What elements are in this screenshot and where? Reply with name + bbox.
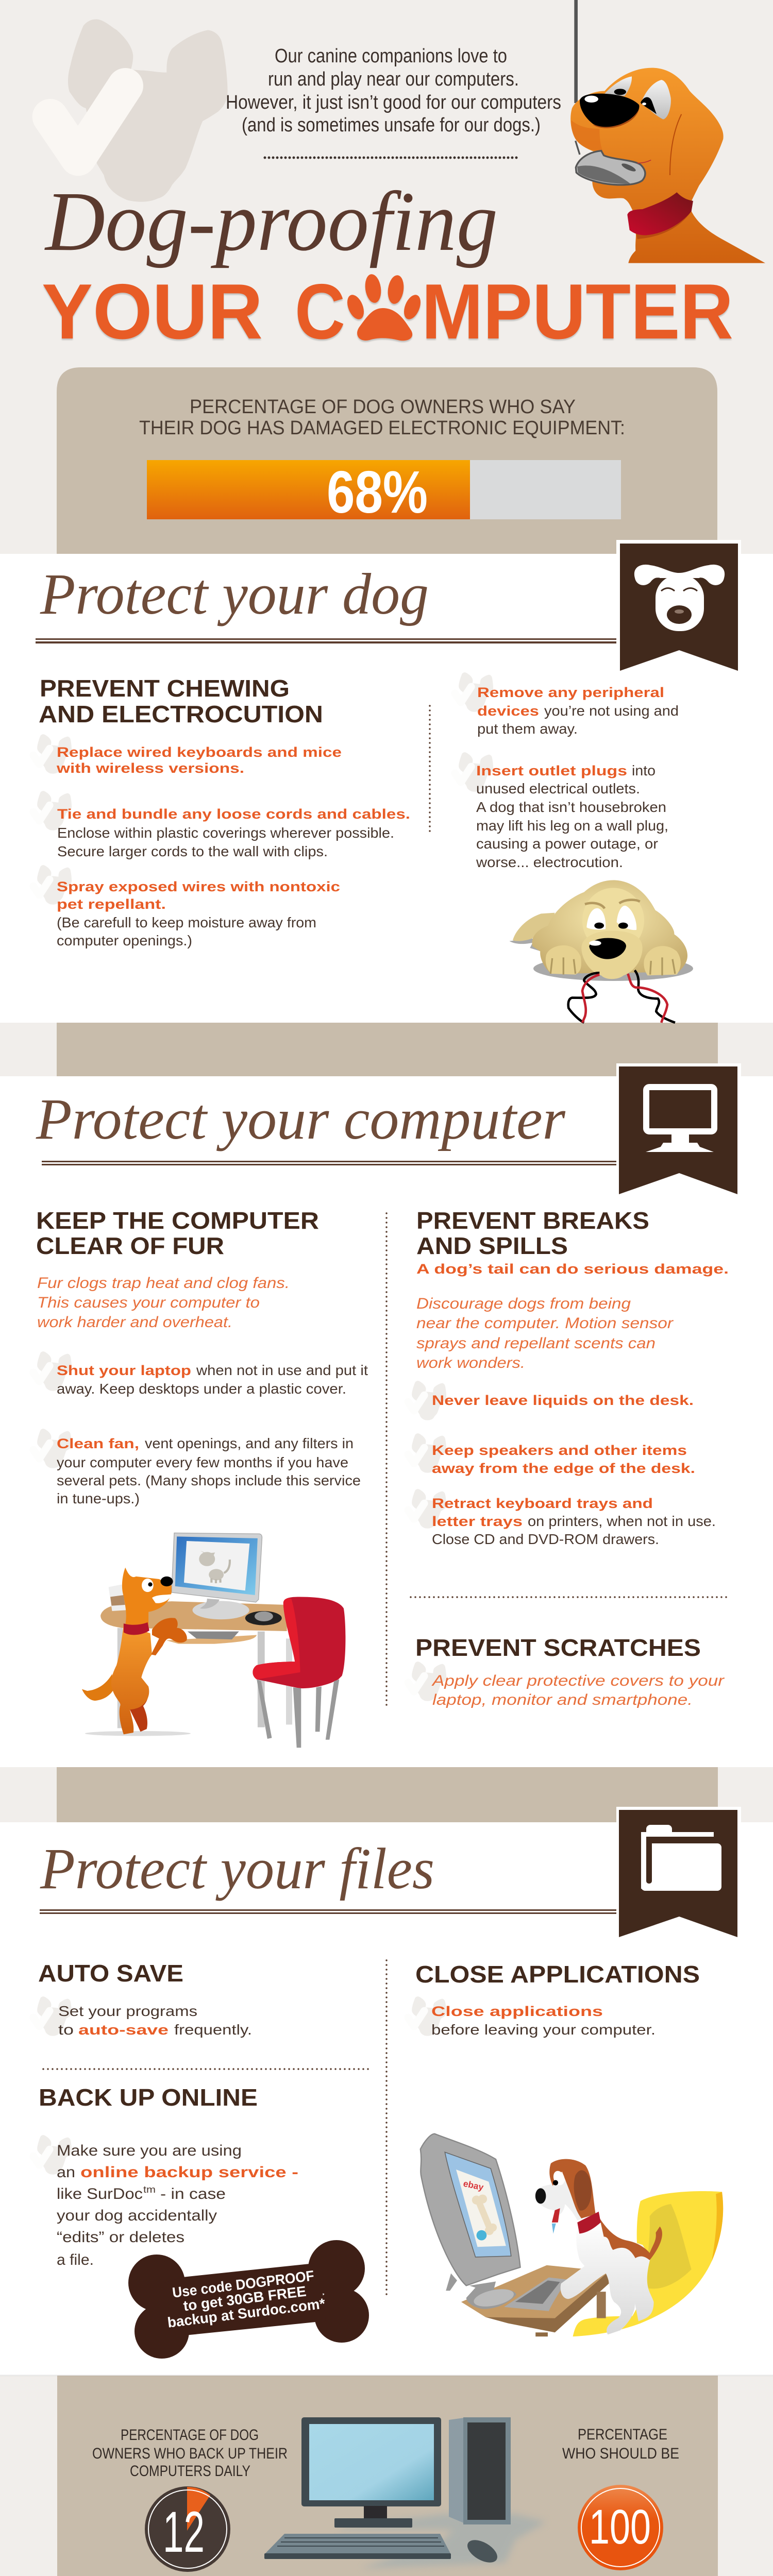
banner: folder icon (616, 1807, 741, 1942)
section: back up online: an (57, 2164, 75, 2181)
chart: 100 percent dial (578, 2485, 663, 2570)
callout: bone with coupon code: Use code DOGPROOF (172, 2267, 315, 2301)
panel: 68 percent statistic: PERCENTAGE OF DOG OWNERS WHO SAY (190, 396, 576, 418)
heading: prevent chewing: PREVENT CHEWING (40, 675, 290, 702)
tip: retract keyboard trays (408, 1489, 716, 1547)
text: fur clogs: This causes your computer to (37, 1294, 260, 1311)
tip: prevent scratches: PREVENT SCRATCHES (415, 1634, 701, 1661)
tip: prevent scratches: laptop, monitor and smartphone. (432, 1691, 693, 1708)
section: back up online: “edits” or deletes (57, 2229, 184, 2246)
panel: 68 percent statistic: THEIR DOG HAS DAMAGED ELECTRONIC EQUIPMENT: (139, 417, 625, 439)
intro text: However, it just isn’t good for our computers (226, 92, 561, 113)
intro text (226, 45, 561, 136)
tip: remove peripherals: you’re not using and (544, 703, 679, 719)
text: discourage dogs (416, 1295, 674, 1371)
tip: repellant (33, 865, 340, 948)
heading: Protect your computer: Protect your computer (36, 1087, 566, 1151)
banner: dog icon (616, 540, 741, 676)
heading: prevent chewing (39, 675, 323, 727)
callout: bone with coupon code: to get 30GB FREE (182, 2283, 307, 2314)
heading: prevent breaks and spills: A dog’s tail can do serious damage. (416, 1261, 729, 1277)
text: fur clogs: work harder and overheat. (37, 1314, 232, 1331)
tip: prevent scratches: Apply clear protective covers to your (431, 1672, 725, 1689)
tip: wireless keyboards: Replace wired keyboards and mice (57, 744, 342, 760)
tip: prevent scratches (408, 1634, 725, 1708)
title: YOUR COMPUTER with paw: MPUTER (422, 268, 733, 355)
tip: retract keyboard trays: letter trays (432, 1514, 523, 1529)
section: auto save: Set your programs (58, 2003, 197, 2019)
tip: bundle cords: Enclose within plastic coverings wherever possible. (57, 825, 394, 841)
heading: prevent breaks and spills (416, 1207, 729, 1277)
tip: keep speakers away (408, 1433, 695, 1476)
section: auto save: auto-save (78, 2022, 169, 2038)
illustration: tan puppy chewing wires (509, 880, 693, 1023)
tip: bundle cords: Tie and bundle any loose cords and cables. (57, 806, 410, 822)
intro text: run and play near our computers. (268, 69, 519, 90)
panel: protect your files (0, 1807, 773, 2376)
section: auto save: frequently. (174, 2022, 252, 2038)
tip: outlet plugs: causing a power outage, or (476, 836, 658, 852)
text: fur clogs: Fur clogs trap heat and clog fans. (37, 1275, 290, 1292)
intro text: (and is sometimes unsafe for our dogs.) (242, 114, 541, 136)
tip: keep speakers away: Keep speakers and other items (432, 1443, 687, 1458)
tip: repellant: pet repellant. (57, 896, 166, 912)
section: auto save (33, 1960, 252, 2038)
tip: outlet plugs: into (632, 762, 656, 778)
section: back up online: a file. (57, 2251, 94, 2268)
illustration: desktop computer (264, 2417, 546, 2568)
tip: remove peripherals: Remove any peripheral (477, 685, 664, 700)
section: back up online (33, 2084, 298, 2268)
tip: shut your laptop: when not in use and put it (196, 1362, 368, 1378)
bar chart: 68 percent: 68% (327, 459, 428, 526)
tip: repellant: Spray exposed wires with nontoxic (57, 879, 340, 894)
tip: remove peripherals: put them away. (477, 721, 578, 737)
section: back up online: online backup service - (80, 2164, 298, 2181)
tip: shut your laptop: Shut your laptop (57, 1363, 191, 1378)
callout: bone with coupon code (128, 2240, 369, 2359)
tip: never leave liquids (408, 1381, 694, 1420)
tip: clean fan: your computer every few months if you have (57, 1454, 348, 1470)
text: percent who should be (562, 2426, 679, 2462)
title: Dog-proofing: Dog-proofing (44, 174, 498, 268)
title: YOUR COMPUTER with paw: YOUR (42, 268, 263, 355)
chart: 12 percent dial (145, 2486, 230, 2572)
banner: computer icon (616, 1063, 741, 1199)
tip: clean fan (33, 1429, 361, 1506)
section: back up online: Make sure you are using (57, 2142, 242, 2159)
heading: prevent breaks and spills: PREVENT BREAKS (416, 1207, 649, 1234)
illustration: orange dog holding a computer mouse (570, 0, 765, 263)
illustration: beagle at keyboard with monitor and yellow chair: ebay (462, 2178, 484, 2193)
tip: shut your laptop (33, 1351, 368, 1397)
callout: bone with coupon code: backup at Surdoc.com* (166, 2295, 326, 2331)
text: percent who back up daily: OWNERS WHO BACK UP THEIR (92, 2445, 288, 2462)
heading: prevent chewing: AND ELECTROCUTION (39, 701, 323, 727)
tip: repellant: (Be carefull to keep moisture away from (57, 914, 316, 930)
tip: remove peripherals: devices (477, 703, 539, 719)
tip: outlet plugs: unused electrical outlets. (476, 781, 640, 796)
text: percent who back up daily: COMPUTERS DAILY (130, 2463, 250, 2480)
section: close applications (408, 1961, 700, 2038)
tip: clean fan: in tune-ups.) (57, 1490, 140, 1506)
section: back up online: BACK UP ONLINE (39, 2084, 258, 2111)
tip: retract keyboard trays: on printers, when not in use. (528, 1513, 716, 1529)
panel: backup statistics (0, 2375, 773, 2576)
section: auto save: AUTO SAVE (38, 1960, 183, 1987)
tip: outlet plugs: worse... electrocution. (476, 854, 623, 870)
text: percent who back up daily: PERCENTAGE OF DOG (121, 2427, 259, 2444)
section: back up online: - in case (160, 2185, 226, 2202)
tip: retract keyboard trays: Retract keyboard trays and (432, 1496, 653, 1511)
intro text: Our canine companions love to (275, 45, 507, 67)
panel: protect your dog (0, 540, 773, 1076)
text: percent who back up daily (92, 2427, 288, 2480)
tip: wireless keyboards (33, 734, 342, 776)
text: discourage dogs: Discourage dogs from being (416, 1295, 631, 1312)
text: fur clogs (37, 1275, 290, 1331)
chart: 100 percent dial: 100 (589, 2500, 651, 2554)
bar chart: 68 percent (147, 459, 621, 526)
tip: outlet plugs: Insert outlet plugs (476, 763, 627, 778)
section: close applications: CLOSE APPLICATIONS (415, 1961, 700, 1988)
illustration: orange dog at desk with monitor and red chair (82, 1533, 345, 1748)
tip: remove peripherals (455, 672, 679, 737)
tip: wireless keyboards: with wireless versions. (56, 760, 244, 776)
text: percent who should be: WHO SHOULD BE (562, 2445, 679, 2462)
tip: keep speakers away: away from the edge of the desk. (432, 1461, 695, 1476)
panel: protect your computer (0, 1063, 773, 1822)
tip: bundle cords: Secure larger cords to the wall with clips. (57, 843, 328, 859)
section: auto save: to (58, 2022, 74, 2038)
section: back up online: tm (143, 2184, 156, 2195)
tip: clean fan: Clean fan, (57, 1436, 139, 1451)
tip: bundle cords (33, 791, 410, 859)
section: close applications: Close applications (431, 2004, 603, 2019)
tip: outlet plugs: A dog that isn’t housebroken (476, 799, 666, 815)
section: close applications: before leaving your computer. (431, 2022, 656, 2038)
tip: clean fan: vent openings, and any filters in (145, 1435, 354, 1451)
text: discourage dogs: sprays and repellant scents can (416, 1335, 656, 1352)
tip: clean fan: several pets. (Many shops include this service (57, 1472, 361, 1488)
tip: shut your laptop: away. Keep desktops under a plastic cover. (57, 1381, 346, 1397)
chart: 12 percent dial: 12 (163, 2500, 205, 2564)
tip: never leave liquids: Never leave liquids on the desk. (432, 1393, 694, 1408)
heading: Protect your files: Protect your files (40, 1837, 434, 1901)
heading: prevent breaks and spills: AND SPILLS (416, 1232, 568, 1259)
text: discourage dogs: near the computer. Motion sensor (416, 1315, 674, 1332)
heading: keep the computer clear of fur (36, 1207, 319, 1259)
title: YOUR COMPUTER with paw: C (295, 268, 345, 355)
illustration: beagle at keyboard with monitor and yellow chair (421, 2134, 723, 2336)
tip: retract keyboard trays: Close CD and DVD-ROM drawers. (432, 1531, 659, 1547)
tip: repellant: computer openings.) (57, 933, 192, 948)
section: back up online: your dog accidentally (57, 2207, 217, 2224)
text: discourage dogs: work wonders. (416, 1354, 525, 1371)
heading: Protect your dog: Protect your dog (40, 562, 429, 626)
icon: large checkmark with dog ears (50, 19, 228, 202)
heading: keep the computer clear of fur: KEEP THE COMPUTER (36, 1207, 319, 1234)
section: back up online: like SurDoc (57, 2185, 143, 2202)
title: YOUR COMPUTER with paw (42, 268, 733, 355)
panel: 68 percent statistic (57, 367, 717, 556)
tip: outlet plugs (455, 752, 668, 870)
heading: keep the computer clear of fur: CLEAR OF FUR (36, 1232, 224, 1259)
text: percent who should be: PERCENTAGE (578, 2426, 667, 2443)
tip: outlet plugs: may lift his leg on a wall plug, (476, 818, 668, 834)
